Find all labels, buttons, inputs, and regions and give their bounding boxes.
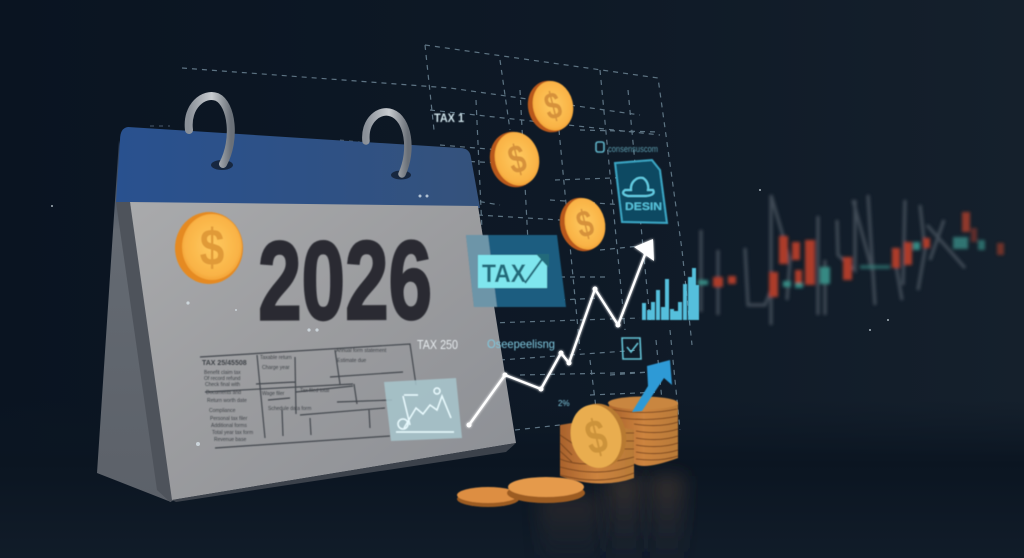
small checkbox icon [622,338,641,359]
ring right [366,112,411,180]
tax form: Estimate due [337,358,366,364]
label: percent: 2% [558,399,570,408]
teal candles [698,237,985,288]
mini chart tile on calendar [384,378,462,441]
arrow head [634,239,654,261]
red candles [713,212,1004,297]
holographic grid panel [182,45,692,440]
label: TAX 1: TAX 1 [434,111,464,125]
tax form: Total year tax form [212,430,253,436]
tax label: TAX [482,260,526,288]
tax form: Taxable return [260,355,292,361]
mini bar chart [642,268,699,320]
tax form: Of record refund [204,376,241,382]
label: caption: Oseepeelisng [487,337,555,351]
tax form: Benefit claim tax [204,370,241,376]
label: TAX 250: TAX 250 [417,337,458,352]
large tilted coin: $ [580,409,612,465]
year 2026: 2026 [258,219,432,343]
sparkle particles [51,189,889,446]
calendar back stand [97,140,171,502]
coin lower: $ [572,203,598,247]
coin top: $ [540,85,566,129]
tax form [200,344,416,448]
tax panel [466,235,566,307]
ring left [189,96,233,170]
floating coins [484,76,611,256]
tax form: Return worth date [207,398,247,404]
small labels [487,337,570,408]
document label: DESIN [625,201,662,213]
calendar thick page edge [116,202,180,502]
calendar blue header [116,127,480,208]
calendar gray page [130,202,516,500]
tax form: Tax filed total [300,388,329,394]
candlestick chart (blurred, right side) [698,195,1004,325]
flat coin left [457,487,519,507]
coin middle [484,126,545,192]
left stack [560,420,634,484]
tax form: Documents and [206,390,241,396]
tax form: Personal tax filer [210,416,248,422]
icon: design document card [615,160,667,223]
coin stacks [457,396,678,507]
coin top [522,76,579,137]
small caption with check box icon [596,142,658,154]
icon: blue up arrow [632,360,672,412]
coin middle: $ [504,136,531,183]
tax form: Wage filer [262,391,285,397]
tax form: Additional forms [211,423,247,429]
coin on calendar [175,212,243,284]
large tilted coin [564,398,633,473]
form heading: TAX 25/45508 [202,360,247,367]
calendar [97,96,516,502]
flat coin right [507,477,585,503]
grid overlay on calendar header [150,126,475,300]
page stack shadow at lower right [172,443,516,502]
coin lower [554,193,611,256]
tax form: Compliance [209,408,236,414]
rising line chart [466,239,654,428]
tax form: Check final with [205,382,240,388]
small caption with check box icon: consensuscom [608,144,658,154]
right stack [608,396,678,466]
coin on calendar: $ [200,219,224,277]
tax form: Schedule data form [268,406,311,412]
tax form: Revenue base [214,437,246,443]
tax form: Charge year [262,365,290,371]
tax form: Annual form statement [336,348,387,354]
